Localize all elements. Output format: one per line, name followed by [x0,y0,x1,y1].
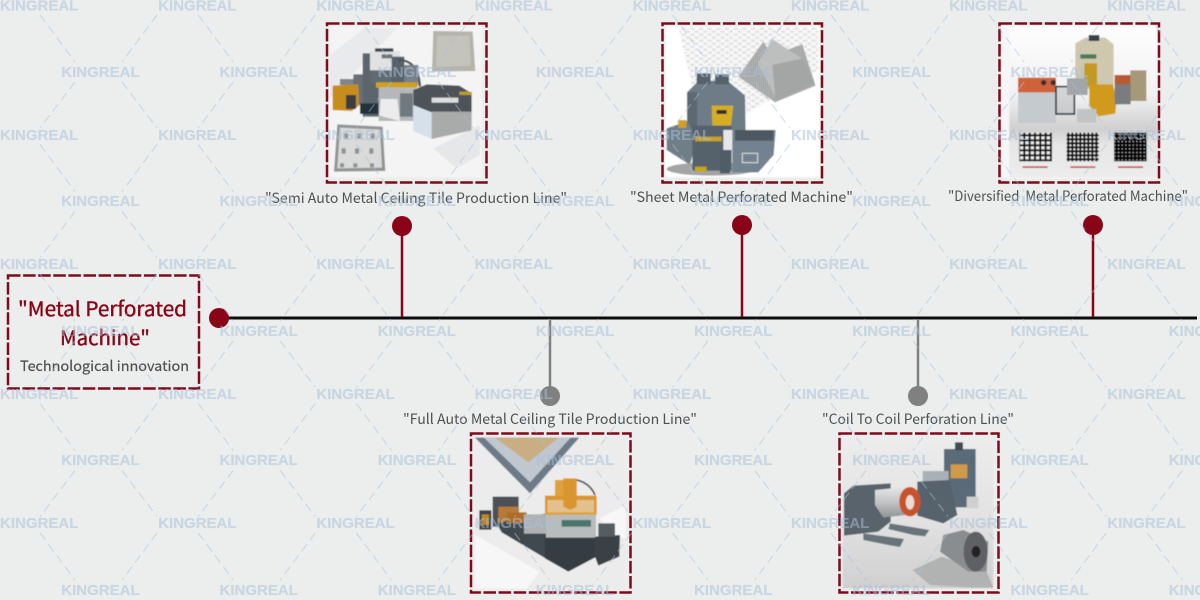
marker: full auto line [540,319,560,406]
timeline start marker [209,308,229,328]
watermark layer: KINGREAL [378,452,456,469]
watermark layer: KINGREAL [475,127,553,144]
watermark layer: KINGREAL [694,323,772,340]
timeline axis [219,316,1197,320]
watermark layer: KINGREAL [694,193,772,210]
watermark layer: KINGREAL [949,386,1028,403]
label: semi auto line: "Semi Auto Metal Ceiling Tile Production Line" [265,188,567,208]
photo: coil to coil perforation line [843,438,993,588]
watermark layer: KINGREAL [0,386,78,403]
watermark layer: KINGREAL [1107,515,1186,532]
watermark layer: KINGREAL [1107,386,1186,403]
watermark layer: KINGREAL [0,127,78,144]
frame: sheet metal machine photo [662,24,822,182]
watermark layer: KINGREAL [852,452,931,469]
watermark layer: KINGREAL [1010,452,1089,469]
watermark layer: KINGREAL [1010,582,1089,599]
watermark layer: KINGREAL [852,323,931,340]
watermark layer: KINGREAL [536,323,614,340]
watermark layer: KINGREAL [536,193,614,210]
watermark layer: KINGREAL [378,582,456,599]
watermark layer: KINGREAL [694,452,772,469]
watermark layer: KINGREAL [220,452,298,469]
watermark layer: KINGREAL [1107,127,1186,144]
watermark layer: KINGREAL [61,64,140,81]
watermark layer: KINGREAL [158,515,237,532]
watermark layer: KINGREAL [633,515,711,532]
photo: semi auto metal ceiling tile production line [330,27,482,177]
watermark layer: KINGREAL [949,256,1028,273]
watermark layer: KINGREAL [852,582,931,599]
watermark layer: KINGREAL [61,323,140,340]
watermark layer: KINGREAL [378,193,456,210]
watermark layer: KINGREAL [61,193,140,210]
panel: main title box: "Metal Perforated [18,293,187,322]
watermark layer: KINGREAL [316,127,395,144]
frame: diversified machine photo [1000,24,1159,182]
watermark layer: KINGREAL [220,64,298,81]
watermark layer: KINGREAL [791,127,869,144]
watermark layer: KINGREAL [852,193,931,210]
watermark layer: KINGREAL [536,64,614,81]
marker: diversified machine [1083,215,1103,317]
watermark layer: KINGREAL [220,323,298,340]
watermark layer: KINGREAL [633,256,711,273]
watermark layer: KINGREAL [536,452,614,469]
watermark layer: KINGREAL [536,582,614,599]
frame: semi auto line photo [327,24,486,182]
marker: sheet metal machine [732,215,752,317]
watermark layer: KINGREAL [1107,256,1186,273]
watermark layer: KINGREAL [694,64,772,81]
photo: full auto metal ceiling tile production line [475,437,626,588]
watermark layer: KINGREAL [475,386,553,403]
watermark layer: KINGREAL [316,256,395,273]
watermark layer: KINGREAL [316,386,395,403]
watermark layer: KINGREAL [475,256,553,273]
label: diversified machine: "Diversified Metal Perforated Machine" [948,186,1188,206]
photo: diversified metal perforated machine [1002,26,1157,178]
watermark layer: KINGREAL [220,582,298,599]
watermark layer: KINGREAL [1010,323,1089,340]
watermark layer: KINGREAL [791,386,869,403]
watermark layer: KINGREAL [61,452,140,469]
watermark layer: KINGREAL [61,582,140,599]
watermark layer: KINGREAL [791,515,869,532]
watermark layer: KINGREAL [949,127,1028,144]
panel: main title box: Machine" [60,322,150,351]
watermark layer: KINGREAL [316,515,395,532]
watermark layer: KINGREAL [158,127,237,144]
watermark layer: KINGREAL [633,386,711,403]
watermark layer: KINGREAL [949,515,1028,532]
label: full auto line: "Full Auto Metal Ceiling Tile Production Line" [403,409,697,429]
watermark layer: KINGREAL [1010,64,1089,81]
watermark layer: KINGREAL [0,256,78,273]
panel: main title box: Technological innovation [20,356,189,376]
watermark layer: KINGREAL [1010,193,1089,210]
marker: coil to coil line [908,319,928,406]
watermark layer: KINGREAL [378,64,456,81]
watermark layer: KINGREAL [475,515,553,532]
photo: sheet metal perforated machine [666,27,820,177]
frame: coil to coil photo [840,434,998,592]
frame: full auto line photo [471,434,630,592]
watermark layer: KINGREAL [220,193,298,210]
marker: semi auto line [392,216,412,317]
watermark layer: KINGREAL [633,127,711,144]
watermark layer: KINGREAL [158,386,237,403]
label: coil to coil line: "Coil To Coil Perforation Line" [822,409,1014,429]
watermark layer: KINGREAL [852,64,931,81]
watermark layer: KINGREAL [0,515,78,532]
watermark layer: KINGREAL [378,323,456,340]
watermark layer: KINGREAL [694,582,772,599]
panel: main title box [8,276,199,388]
label: sheet metal machine: "Sheet Metal Perforated Machine" [630,187,853,207]
watermark layer: KINGREAL [791,256,869,273]
watermark layer: KINGREAL [158,256,237,273]
